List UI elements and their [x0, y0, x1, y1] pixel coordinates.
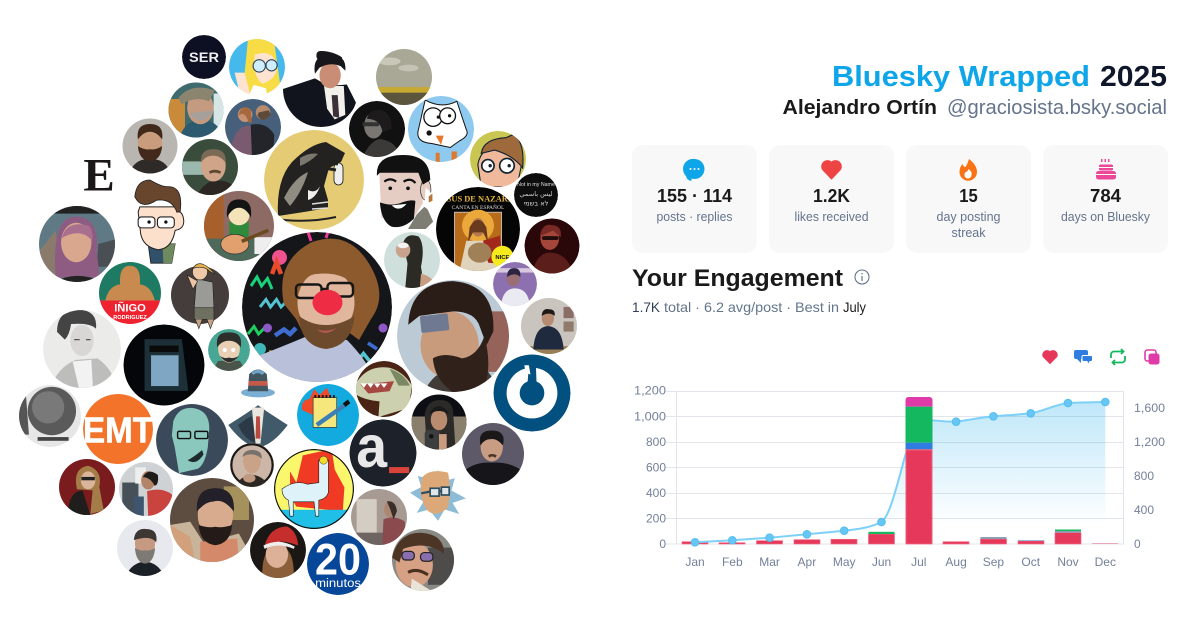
avatar: headless suit illustration	[228, 405, 288, 447]
month labels: Jul	[911, 555, 926, 569]
card: posts and replies	[632, 145, 757, 253]
avatar: girl with santa hat	[250, 522, 306, 578]
avatar: man in black at event	[462, 423, 524, 485]
stat value: 1.2K	[813, 186, 850, 206]
month labels: Jan	[685, 555, 705, 569]
avatar: teal bald man with glasses	[156, 404, 228, 476]
month labels	[685, 555, 1116, 569]
month labels: Dec	[1095, 555, 1116, 569]
avatar: Mahler photograph	[43, 310, 121, 388]
avatar: couple back to back	[225, 99, 281, 155]
avatar: bearded cartoon	[377, 155, 433, 229]
avatar: crocodile puppet	[356, 361, 412, 417]
right axis labels: 400	[1134, 503, 1154, 517]
cumulative line	[695, 402, 1105, 542]
icon: quotes legend	[1145, 350, 1160, 364]
icon: chat bubble	[683, 159, 704, 181]
icon: heart legend	[1043, 351, 1057, 364]
avatar: man in red shirt	[119, 462, 173, 516]
avatar: Not in my Name: לא בשמי	[524, 200, 549, 208]
avatar: blonde cartoon	[229, 39, 285, 95]
avatar: 20 minutos logo: minutos	[315, 577, 361, 590]
avatar: guitar cartoon	[204, 191, 274, 261]
area under cumulative line	[695, 402, 1105, 544]
engagement summary: July	[843, 299, 866, 315]
avatar: dark profile man	[349, 101, 405, 157]
avatar: Jesus de Nazaret poster: JESUS DE NAZARET	[437, 194, 519, 203]
avatar: man in red light	[524, 218, 580, 274]
avatar: man with turtleneck	[521, 298, 577, 354]
avatar: older man pensive	[230, 443, 274, 487]
avatar: dark window	[124, 324, 204, 406]
avatar: bearded man white background	[117, 520, 173, 576]
stat label: streak	[952, 225, 986, 240]
left axis labels: 800	[646, 435, 666, 449]
avatar: woman in red room	[59, 459, 115, 515]
icon: info	[855, 270, 869, 284]
avatar: Jesus de Nazaret poster	[436, 187, 520, 273]
chart: engagement by month	[634, 384, 1165, 569]
month labels: Oct	[1021, 555, 1041, 569]
card: streak	[906, 145, 1031, 253]
month labels: Apr	[798, 555, 816, 569]
right axis labels	[1134, 401, 1165, 551]
panel: stats cards	[632, 145, 1168, 253]
avatar: the thing Inigo Rodriguez	[99, 262, 161, 324]
avatar: big man with clown nose	[242, 229, 392, 382]
avatar: landscape	[376, 49, 432, 105]
avatar: Not in my Name: ليس باسمي	[519, 190, 553, 198]
avatar: the thing Inigo Rodriguez: RODRIGUEZ	[113, 315, 147, 321]
avatar: a underscore logo: a	[356, 415, 388, 480]
avatar: cartoon creature	[408, 96, 474, 163]
avatar: microphone	[19, 385, 81, 447]
left axis labels: 600	[646, 460, 666, 474]
engagement summary: 1.7K	[632, 299, 661, 315]
line markers	[691, 398, 1109, 546]
avatar: Not in my Name	[514, 173, 558, 217]
avatar cluster	[19, 35, 580, 595]
stat label: likes received	[794, 209, 868, 224]
avatar: pencil and notepad	[297, 384, 359, 446]
stat label: days on Bluesky	[1061, 209, 1151, 224]
handle: @graciosista.bsky.social	[947, 97, 1167, 119]
avatar: the thing Inigo Rodriguez: IÑIGO	[114, 302, 146, 315]
left axis labels: 200	[646, 512, 666, 526]
avatar: blond boy cartoon	[171, 264, 229, 329]
stat label: posts · replies	[656, 209, 732, 224]
right axis labels: 800	[1134, 469, 1154, 483]
month labels: Nov	[1057, 555, 1079, 569]
avatar: 20 minutos logo: 20	[315, 536, 361, 585]
stat value: 784	[1090, 186, 1121, 206]
avatar: bearded man in room	[397, 280, 509, 392]
card: likes	[769, 145, 894, 253]
stat value: 15	[959, 186, 978, 206]
icon: heart	[822, 161, 841, 179]
icon: reposts legend	[1111, 349, 1125, 365]
avatar: EMT logo	[83, 394, 153, 464]
month labels: May	[833, 555, 856, 569]
avatar: Not in my Name: Not in my Name	[517, 182, 555, 188]
avatar: El Español E logo: E	[83, 149, 115, 201]
month labels: Feb	[722, 555, 743, 569]
month labels: Aug	[945, 555, 967, 569]
avatar: pink haired woman	[39, 206, 115, 282]
avatar: old photo room	[351, 489, 407, 545]
avatar: El Español E logo	[71, 146, 127, 202]
icon: flame	[960, 159, 977, 181]
icon: replies legend	[1074, 350, 1092, 364]
avatar: a underscore logo	[350, 415, 416, 486]
avatar: man with cap	[168, 82, 224, 138]
avatar: SER logo	[182, 35, 226, 79]
title: 2025	[1100, 61, 1167, 93]
avatar: blue ring logo	[494, 354, 570, 432]
avatar: rowan atkinson portrait	[283, 51, 359, 127]
left axis labels	[634, 384, 666, 551]
avatar: Jesus de Nazaret poster: NICE	[495, 255, 509, 261]
avatar: man with mustache	[182, 139, 238, 195]
stat value: 155 · 114	[657, 186, 732, 206]
avatar: cartoon man with glasses	[135, 180, 184, 263]
avatar: purple toned boy	[493, 262, 537, 306]
display name: Alejandro Ortín	[782, 97, 937, 119]
stacked bars for small months	[682, 530, 1118, 544]
heading: Your Engagement: Your Engagement	[632, 265, 843, 292]
avatar: SER logo: SER	[189, 49, 219, 65]
right axis labels: 1,600	[1134, 401, 1165, 415]
right axis labels: 0	[1134, 537, 1141, 551]
engagement summary: total · 6.2 avg/post · Best in	[664, 299, 839, 315]
avatar: 20 minutos logo	[307, 533, 369, 595]
avatar: selfie woman	[412, 394, 466, 450]
month labels: Jun	[872, 555, 891, 569]
icon: cake	[1096, 159, 1116, 180]
month labels: Sep	[983, 555, 1004, 569]
month labels: Mar	[759, 555, 780, 569]
avatar: EMT logo: EMT	[83, 409, 153, 450]
avatar: woman in profile	[384, 232, 440, 288]
gridlines	[666, 391, 1124, 544]
avatar: bearded man grey wall	[122, 118, 178, 174]
left axis labels: 0	[659, 537, 666, 551]
stat label: day posting	[936, 209, 1000, 224]
left axis labels: 1,000	[634, 410, 666, 424]
avatar: teal cartoon man	[208, 329, 250, 371]
chart legend icons	[1043, 349, 1160, 365]
card: days on Bluesky	[1043, 145, 1168, 253]
right axis labels: 1,200	[1134, 435, 1165, 449]
avatar: bread head with glasses	[410, 470, 466, 521]
avatar: brown hair cartoon	[470, 131, 526, 187]
avatar: smiling man plaid shirt	[170, 478, 254, 562]
avatar: llama with flames	[274, 449, 354, 529]
header	[782, 61, 1167, 119]
stat label	[936, 209, 1000, 240]
avatar: hat illustration	[241, 369, 275, 397]
avatar: Jesus de Nazaret poster: CANTA EN ESPAÑOL	[452, 203, 505, 211]
title: Bluesky Wrapped	[832, 61, 1090, 93]
avatar: rat on gold	[264, 130, 364, 230]
July stacked bar	[906, 397, 932, 544]
left axis labels: 1,200	[634, 384, 666, 398]
avatar: man with violet glasses eating	[392, 529, 454, 591]
left axis labels: 400	[646, 486, 666, 500]
